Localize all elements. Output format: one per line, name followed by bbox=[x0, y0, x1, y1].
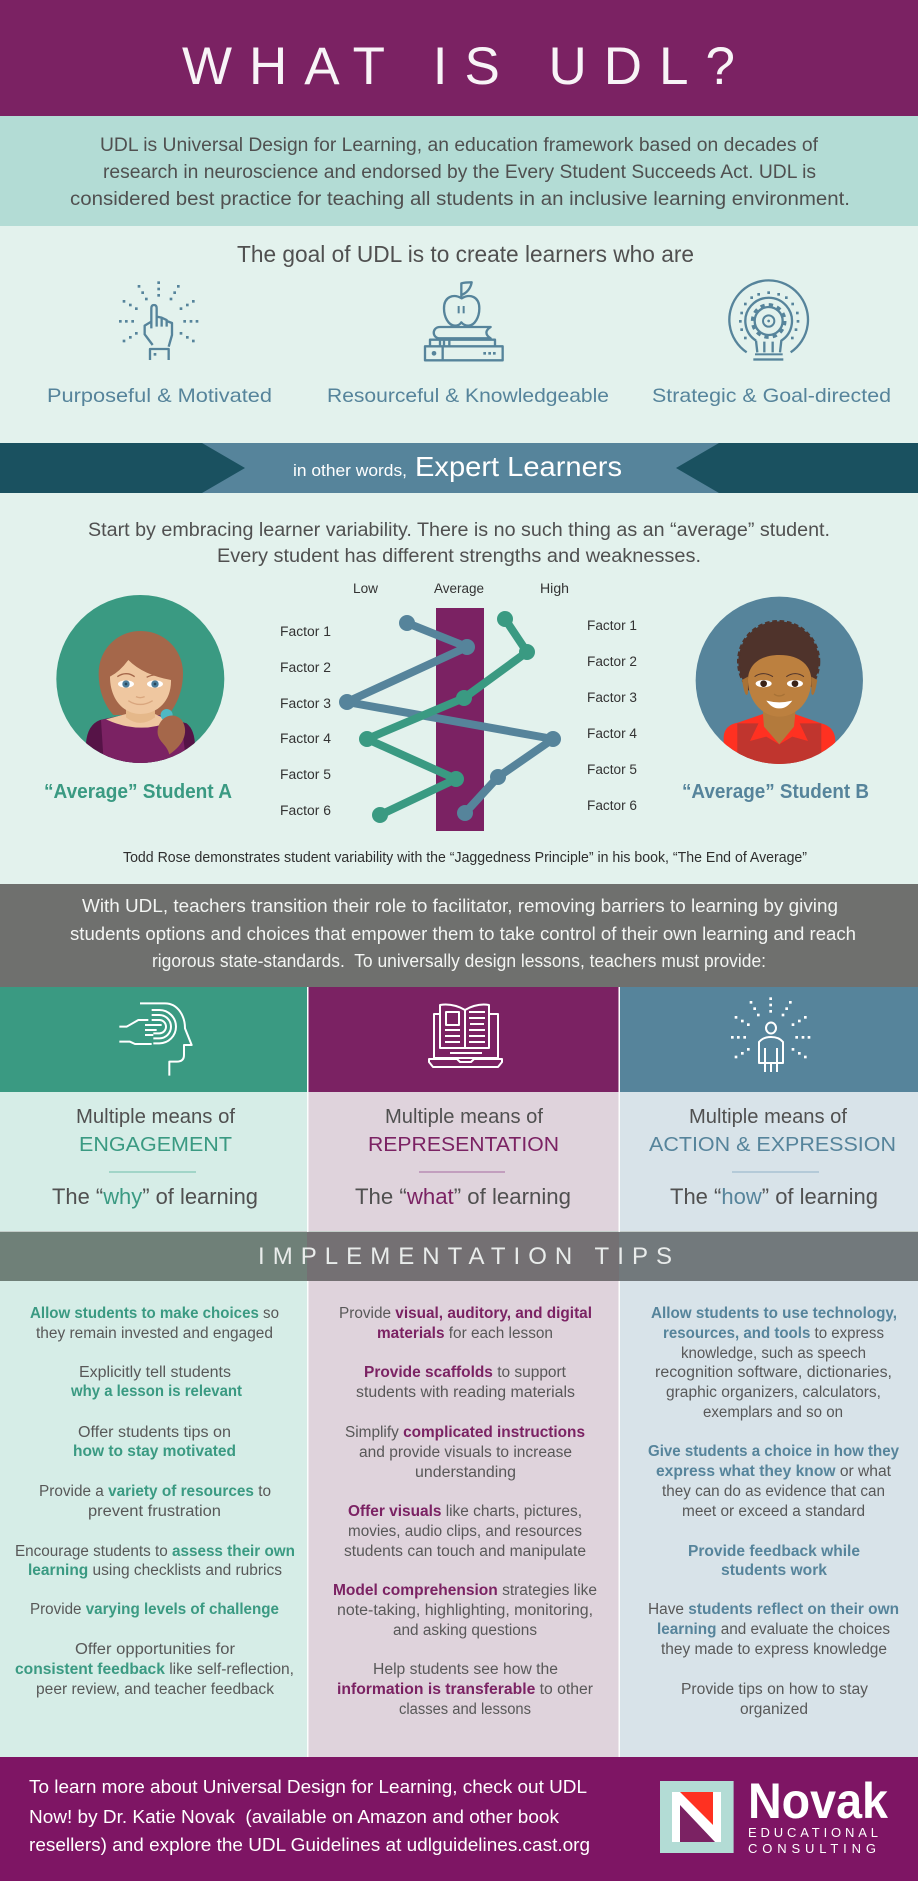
label: purposeful: Purposeful & Motivated bbox=[47, 385, 272, 407]
panel: action and expression column bbox=[620, 987, 918, 1757]
text: in other words: in other words, bbox=[293, 461, 407, 480]
panel: engagement column bbox=[0, 987, 307, 1757]
chart: right factor labels: Factor 3 bbox=[587, 690, 637, 705]
text block: representation tips: and provide visuals to increase bbox=[359, 1444, 572, 1461]
text block: definition of UDL: UDL is Universal Design for Learning, an education framework based on decades of bbox=[100, 135, 819, 156]
text: expert learners: Expert Learners bbox=[415, 451, 622, 482]
portrait: student A bbox=[56, 595, 224, 767]
label: student A: “Average” Student A bbox=[44, 781, 232, 803]
text block: variability intro bbox=[88, 520, 830, 567]
text block: teacher role: With UDL, teachers transition their role to facilitator, removing barriers to learning by giving bbox=[82, 895, 838, 916]
text block: action and expression tips: organized bbox=[740, 1701, 808, 1718]
icon: apple on books bbox=[425, 282, 503, 360]
text block: engagement tips: why a lesson is relevant bbox=[70, 1383, 242, 1400]
text block: teacher role bbox=[70, 895, 856, 971]
banner: implementation tips: IMPLEMENTATION TIPS bbox=[258, 1243, 672, 1270]
text block: learn more bbox=[29, 1776, 590, 1855]
text block: variability intro: Every student has different strengths and weaknesses. bbox=[217, 546, 701, 567]
chart axis labels bbox=[353, 581, 569, 596]
panel: footer bbox=[0, 1757, 918, 1881]
text block: representation tips: and asking questions bbox=[393, 1622, 537, 1639]
text block: action and expression tips: Provide tips on how to stay bbox=[681, 1681, 868, 1698]
chart axis labels: High bbox=[540, 581, 569, 596]
text block: definition of UDL bbox=[70, 135, 850, 210]
panel: learner variability bbox=[45, 522, 868, 865]
logo: Novak N mark bbox=[660, 1781, 734, 1853]
text block: engagement tips: Encourage students to assess their own bbox=[15, 1543, 295, 1560]
chart: left factor labels: Factor 2 bbox=[280, 660, 331, 675]
text block: representation tips: materials for each lesson bbox=[377, 1325, 553, 1342]
text: what of learning: The “what” of learning bbox=[355, 1184, 571, 1209]
text block: action and expression tips: exemplars and so on bbox=[703, 1404, 843, 1421]
banner: implementation tips bbox=[0, 1231, 918, 1281]
chart: student B line bbox=[339, 615, 561, 821]
chart: left factor labels: Factor 1 bbox=[280, 624, 331, 639]
text block: definition of UDL: considered best practice for teaching all students in an inclusive learning environment. bbox=[70, 189, 850, 210]
text block: representation tips: students can touch and manipulate bbox=[344, 1543, 586, 1560]
chart: student A line bbox=[359, 611, 535, 823]
text block: action and expression tips: resources, and tools to express bbox=[663, 1325, 884, 1342]
text block: representation tips: Model comprehension strategies like bbox=[333, 1582, 597, 1599]
text block: action and expression tips: Provide feedback while bbox=[688, 1543, 860, 1560]
text block: engagement tips: Provide varying levels of challenge bbox=[30, 1601, 279, 1618]
icon: head with hand bbox=[119, 1003, 192, 1076]
label: student B: “Average” Student B bbox=[682, 781, 869, 803]
text block: action and expression tips: Allow students to use technology, bbox=[651, 1305, 897, 1322]
text block: representation tips: Simplify complicated instructions bbox=[345, 1424, 585, 1441]
text block: teacher role: students options and choices that empower them to take control of their own learning and reach bbox=[70, 923, 856, 944]
chart: jaggedness profile bbox=[280, 581, 637, 831]
icon: open book on laptop bbox=[429, 1005, 502, 1067]
text block: action and expression tips: graphic organizers, calculators, bbox=[666, 1384, 881, 1401]
text block: engagement tips: Allow students to make choices so bbox=[30, 1305, 279, 1322]
text block: representation tips: movies, audio clips, and resources bbox=[348, 1523, 582, 1540]
caption: Todd Rose: Todd Rose demonstrates student variability with the “Jaggedness Principle” in his book, “The End of Average” bbox=[123, 850, 807, 866]
icon: gear light bulb bbox=[729, 280, 808, 361]
logo: Novak wordmark: CONSULTING bbox=[748, 1841, 876, 1856]
text block: action and expression tips: express what they know or what bbox=[656, 1463, 892, 1480]
text block: action and expression tips: learning and evaluate the choices bbox=[657, 1621, 890, 1638]
text block: learn more: To learn more about Universal Design for Learning, check out UDL bbox=[29, 1776, 587, 1797]
chart: left factor labels: Factor 5 bbox=[280, 767, 331, 782]
text block: representation tips: classes and lessons bbox=[399, 1701, 531, 1718]
banner: expert learners bbox=[0, 443, 918, 493]
text block: teacher role: rigorous state-standards. To universally design lessons, teachers must provide: bbox=[152, 950, 766, 971]
label: strategic: Strategic & Goal-directed bbox=[652, 385, 891, 407]
heading: engagement: ENGAGEMENT bbox=[79, 1134, 232, 1156]
text block: representation tips: Provide visual, auditory, and digital bbox=[339, 1305, 592, 1322]
text block: engagement tips: consistent feedback like self-reflection, bbox=[15, 1661, 294, 1678]
logo: Novak wordmark bbox=[748, 1773, 888, 1856]
text: multiple means of: Multiple means of bbox=[689, 1106, 847, 1128]
chart: right factor labels: Factor 4 bbox=[587, 726, 637, 741]
text block: variability intro: Start by embracing learner variability. There is no such thing as an “average” student. bbox=[88, 520, 830, 541]
panel: representation column bbox=[308, 987, 618, 1757]
text: multiple means of: Multiple means of bbox=[385, 1106, 543, 1128]
panel: goal of UDL bbox=[0, 226, 918, 444]
text block: representation tips: Offer visuals like charts, pictures, bbox=[348, 1503, 582, 1520]
text block: action and expression tips: knowledge, such as speech bbox=[681, 1345, 866, 1362]
text block: action and expression tips: they made to express knowledge bbox=[661, 1641, 887, 1658]
text block: representation tips: Provide scaffolds to support bbox=[364, 1364, 567, 1381]
label: resourceful: Resourceful & Knowledgeable bbox=[327, 385, 609, 407]
chart: right factor labels: Factor 1 bbox=[587, 618, 637, 633]
text block: engagement tips bbox=[15, 1305, 295, 1698]
chart: left factor labels: Factor 3 bbox=[280, 696, 331, 711]
icon: hand pointing bbox=[119, 281, 198, 360]
text block: engagement tips: Provide a variety of resources to bbox=[39, 1483, 271, 1500]
text: why of learning: The “why” of learning bbox=[52, 1184, 258, 1209]
text block: representation tips: information is transferable to other bbox=[337, 1681, 593, 1698]
heading: goal: The goal of UDL is to create learners who are bbox=[237, 241, 694, 267]
chart: average band bbox=[436, 608, 484, 831]
text block: action and expression tips: Give students a choice in how they bbox=[648, 1443, 899, 1460]
text block: action and expression tips: Have students reflect on their own bbox=[648, 1601, 899, 1618]
text block: learn more: Now! by Dr. Katie Novak (available on Amazon and other book bbox=[29, 1806, 560, 1827]
text block: engagement tips: Offer students tips on bbox=[78, 1424, 231, 1441]
panel: definition bbox=[0, 116, 918, 226]
title: WHAT IS UDL? bbox=[182, 37, 735, 96]
text block: representation tips bbox=[333, 1305, 597, 1718]
panel: teacher role bbox=[0, 884, 918, 987]
chart: left factor labels: Factor 6 bbox=[280, 803, 331, 818]
heading: representation: REPRESENTATION bbox=[368, 1134, 559, 1156]
column separators bbox=[307, 987, 620, 1757]
text block: representation tips: students with reading materials bbox=[356, 1384, 575, 1401]
text block: action and expression tips: they can do as evidence that can bbox=[662, 1483, 885, 1500]
text: how of learning: The “how” of learning bbox=[670, 1184, 878, 1209]
text block: engagement tips: Explicitly tell students bbox=[79, 1364, 231, 1381]
text block: engagement tips: peer review, and teacher feedback bbox=[36, 1681, 274, 1698]
text block: representation tips: note-taking, highlighting, monitoring, bbox=[337, 1602, 593, 1619]
chart: right factor labels: Factor 2 bbox=[587, 654, 637, 669]
panel: title banner bbox=[0, 0, 918, 116]
logo: Novak wordmark: EDUCATIONAL bbox=[748, 1825, 878, 1840]
chart axis labels: Average bbox=[434, 581, 484, 596]
chart: right factor labels: Factor 6 bbox=[587, 798, 637, 813]
text block: action and expression tips bbox=[648, 1305, 899, 1718]
text block: representation tips: Help students see how the bbox=[373, 1661, 558, 1678]
icon: person with rays bbox=[731, 997, 810, 1072]
chart: left factor labels: Factor 4 bbox=[280, 731, 331, 746]
text block: learn more: resellers) and explore the UDL Guidelines at udlguidelines.cast.org bbox=[29, 1834, 590, 1855]
text block: engagement tips: Offer opportunities for bbox=[75, 1641, 235, 1658]
logo: Novak wordmark: Novak bbox=[748, 1773, 888, 1829]
text block: engagement tips: how to stay motivated bbox=[73, 1443, 236, 1460]
text block: representation tips: understanding bbox=[415, 1464, 516, 1481]
chart: right factor labels bbox=[587, 618, 637, 813]
text block: action and expression tips: students work bbox=[721, 1562, 827, 1579]
text block: engagement tips: they remain invested and engaged bbox=[36, 1325, 273, 1342]
text block: engagement tips: learning using checklists and rubrics bbox=[28, 1562, 282, 1579]
text block: action and expression tips: meet or exceed a standard bbox=[682, 1503, 865, 1520]
chart: right factor labels: Factor 5 bbox=[587, 762, 637, 777]
text: multiple means of: Multiple means of bbox=[76, 1106, 235, 1128]
text block: engagement tips: prevent frustration bbox=[88, 1503, 221, 1520]
chart axis labels: Low bbox=[353, 581, 378, 596]
text block: definition of UDL: research in neuroscience and endorsed by the Every Student Succeeds Act. UDL is bbox=[103, 162, 816, 183]
chart: left factor labels bbox=[280, 624, 331, 818]
text block: action and expression tips: recognition software, dictionaries, bbox=[655, 1364, 892, 1381]
heading: action and expression: ACTION & EXPRESSION bbox=[649, 1134, 896, 1156]
portrait: student B bbox=[696, 597, 863, 767]
